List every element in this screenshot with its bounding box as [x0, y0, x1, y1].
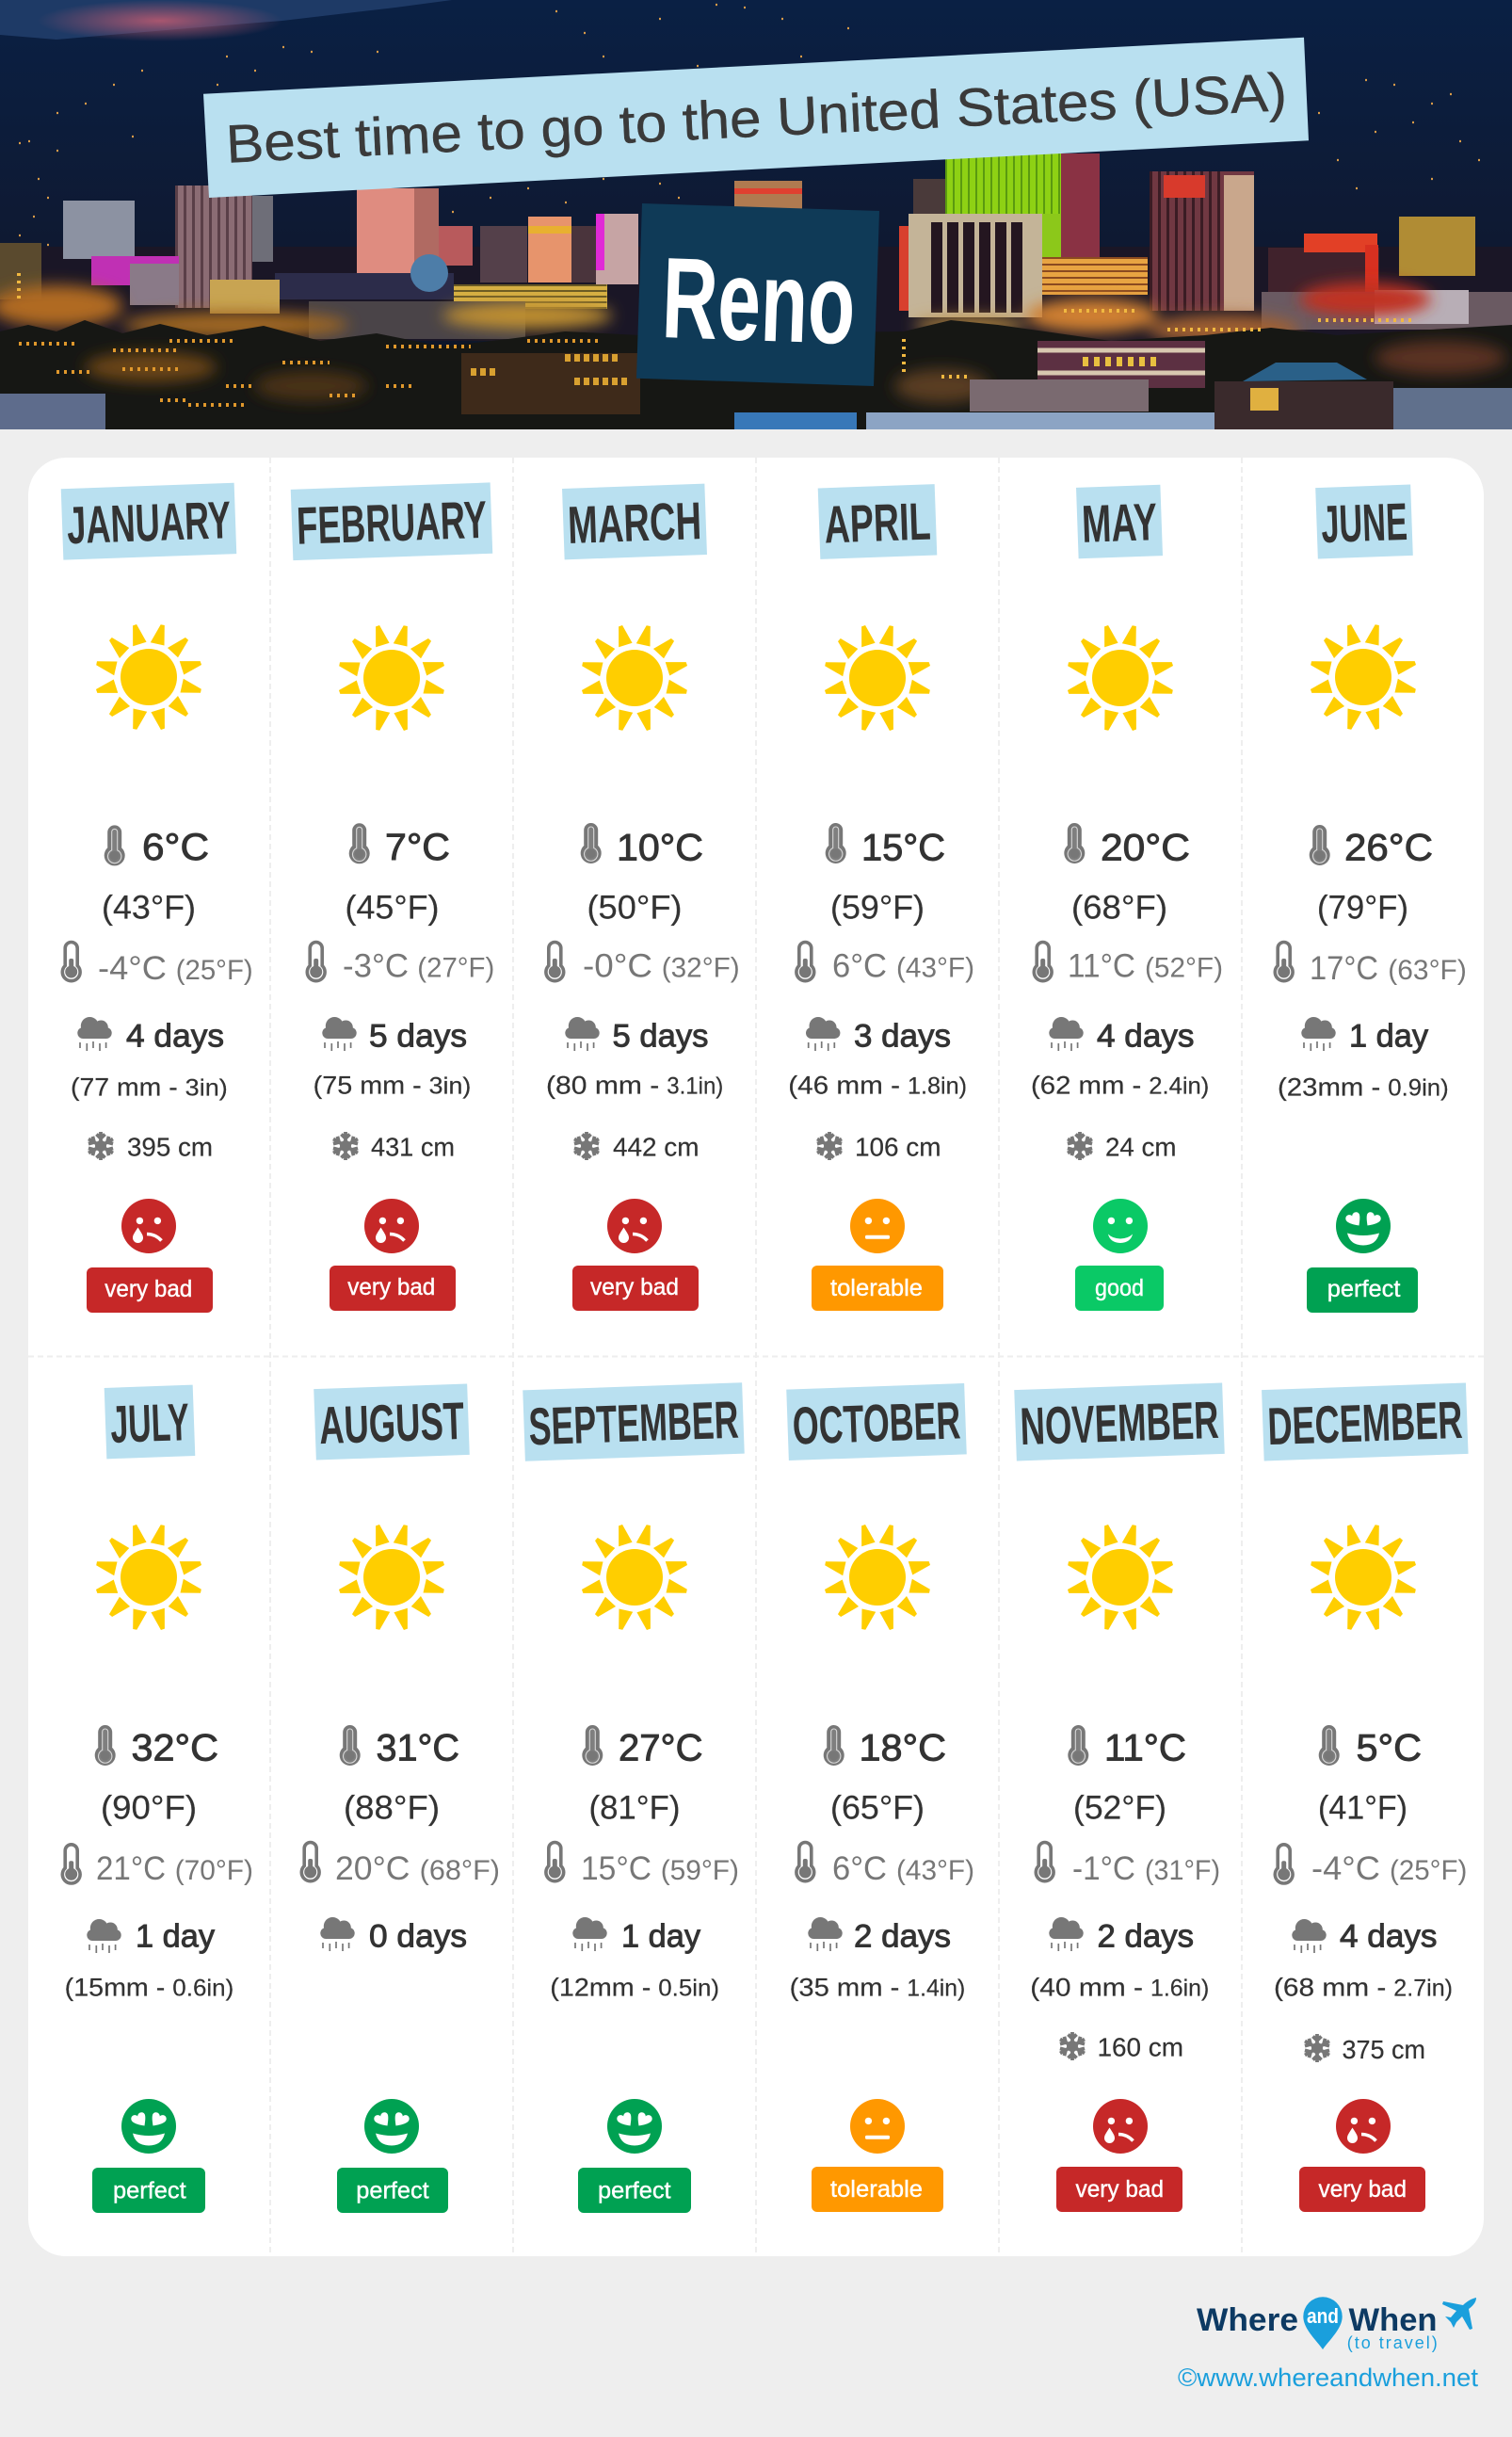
snowfall: [331, 1132, 455, 1162]
icon: good face: [1093, 1199, 1148, 1253]
rainy days: [322, 1017, 467, 1055]
month heading: FEBRUARY: [296, 490, 488, 556]
low temperature: (43°F): [896, 953, 974, 984]
snowfall: 431 cm: [371, 1133, 455, 1162]
low temperature: 17°C: [1310, 950, 1378, 987]
rainy days: 2 days: [854, 1919, 951, 1955]
panel: June: [1275, 485, 1467, 1313]
rainy days: 1 day: [1349, 1019, 1428, 1055]
header photo: Reno skyline at dusk: [0, 0, 1512, 429]
high temperature Fahrenheit: (88°F): [344, 1790, 440, 1827]
rainy days: [808, 1917, 951, 1955]
rainfall: 2.4in): [1149, 1073, 1209, 1100]
rainy days: 1 day: [136, 1919, 215, 1955]
high temperature Fahrenheit: (79°F): [1317, 890, 1408, 927]
high temperature: 18°C: [859, 1727, 946, 1768]
low temperature: (31°F): [1145, 1855, 1220, 1886]
low temperature: [307, 942, 494, 985]
snowfall: [1058, 2032, 1183, 2062]
rating badge: [812, 1266, 943, 1311]
rainy days: [1049, 1917, 1194, 1955]
icon: sun: [824, 1524, 931, 1631]
low temperature: 6°C: [832, 948, 887, 985]
snowfall: [572, 1132, 699, 1162]
high temperature Fahrenheit: (43°F): [102, 890, 196, 927]
rainfall: [71, 1073, 228, 1101]
panel: February: [291, 482, 494, 1311]
high temperature Fahrenheit: (90°F): [101, 1790, 197, 1827]
month heading: SEPTEMBER: [528, 1390, 740, 1456]
rainy days: 5 days: [612, 1019, 708, 1055]
rating badge: [1075, 1266, 1164, 1311]
low temperature: (68°F): [420, 1855, 500, 1886]
high temperature: 31°C: [377, 1727, 459, 1768]
rating badge: [812, 2167, 943, 2212]
low temperature: [796, 1842, 974, 1887]
low temperature: (52°F): [1145, 953, 1223, 984]
rainy days: [77, 1017, 224, 1055]
month heading: OCTOBER: [792, 1390, 961, 1456]
rainfall: 3in): [429, 1073, 471, 1100]
website URL: ©www.whereandwhen.net: [1178, 2364, 1479, 2392]
low temperature: (63°F): [1388, 955, 1467, 986]
icon: sun: [338, 624, 445, 732]
rainy days: [1049, 1017, 1194, 1055]
rainy days: 4 days: [126, 1019, 224, 1055]
high temperature: [340, 1725, 459, 1768]
icon: sun: [1310, 1524, 1417, 1631]
rainfall: [790, 1973, 965, 2001]
high temperature: 6°C: [142, 827, 209, 868]
low temperature: [62, 1845, 253, 1887]
panel: monthly calendar card: [28, 458, 1484, 2256]
high temperature: 15°C: [861, 827, 945, 868]
logo: Where and When: When: [1348, 2302, 1437, 2338]
rainfall: [65, 1973, 233, 2001]
rating badge: [87, 1267, 213, 1313]
icon: sun: [1067, 1524, 1174, 1631]
rating badge: [578, 2168, 691, 2213]
month heading: [291, 482, 492, 560]
rating badge: very bad: [105, 1276, 192, 1302]
city name: Reno: [660, 234, 858, 368]
rating badge: [337, 2168, 448, 2213]
rainfall: 3.1in): [667, 1073, 723, 1100]
rainy days: [87, 1919, 215, 1955]
snowfall: 395 cm: [127, 1133, 213, 1162]
month heading: MARCH: [567, 491, 702, 555]
icon: very bad face: [121, 1199, 176, 1253]
high temperature: [1310, 825, 1433, 868]
low temperature: [546, 942, 740, 985]
panel: July: [62, 1385, 253, 2213]
icon: perfect face: [121, 2099, 176, 2154]
high temperature: [95, 1725, 218, 1768]
rainfall: (23mm -: [1278, 1073, 1380, 1101]
icon: very bad face: [1093, 2099, 1148, 2154]
month heading: AUGUST: [318, 1391, 465, 1455]
rainfall: [1031, 1072, 1209, 1100]
icon: sun: [338, 1524, 445, 1631]
month heading: [105, 1385, 195, 1459]
rainfall: [314, 1072, 471, 1100]
low temperature: [1034, 942, 1223, 985]
rainy days: 1 day: [621, 1919, 700, 1955]
high temperature: 20°C: [1101, 827, 1190, 868]
rating badge: tolerable: [830, 2176, 923, 2203]
logo: Where and When: and: [1307, 2304, 1339, 2328]
icon: tolerable face: [850, 2099, 905, 2154]
rainfall: [788, 1072, 967, 1100]
high temperature: [582, 1725, 702, 1768]
rainfall: (12mm -: [550, 1973, 651, 2001]
rainfall: (80 mm -: [546, 1072, 659, 1100]
logo: Where and When: [1197, 2297, 1476, 2352]
snowfall: 375 cm: [1343, 2035, 1425, 2064]
low temperature: (27°F): [417, 953, 494, 984]
high temperature: [1319, 1725, 1422, 1768]
low temperature: -3°C: [343, 948, 409, 985]
icon: perfect face: [364, 2099, 419, 2154]
panel: March: [546, 484, 740, 1311]
icon: sun: [581, 624, 688, 732]
rainy days: 4 days: [1097, 1019, 1194, 1055]
month heading: JUNE: [1320, 492, 1408, 554]
rainy days: [320, 1917, 467, 1955]
high temperature Fahrenheit: (41°F): [1318, 1790, 1407, 1827]
low temperature: -4°C: [98, 950, 167, 987]
icon: tolerable face: [850, 1199, 905, 1253]
high temperature: [349, 823, 450, 868]
icon: sun: [1067, 624, 1174, 732]
month heading: [314, 1383, 470, 1461]
rating badge: [1307, 1267, 1418, 1313]
rainfall: [546, 1072, 723, 1100]
rainfall: [1278, 1073, 1449, 1101]
low temperature: -4°C: [1311, 1850, 1380, 1887]
rainy days: 3 days: [854, 1019, 951, 1055]
low temperature: [301, 1842, 500, 1887]
rainy days: 2 days: [1098, 1919, 1194, 1955]
rainfall: 3in): [185, 1074, 228, 1101]
rainfall: [1030, 1973, 1209, 2001]
high temperature: [824, 1725, 946, 1768]
rating badge: perfect: [1327, 1276, 1400, 1302]
low temperature: [1275, 1845, 1467, 1887]
high temperature: 7°C: [385, 827, 450, 868]
icon: sun: [581, 1524, 688, 1631]
high temperature: [1068, 1725, 1186, 1768]
high temperature: [581, 823, 703, 868]
icon: map pin: [1303, 2297, 1343, 2349]
rating badge: very bad: [590, 1274, 679, 1300]
rainfall: (15mm -: [65, 1973, 165, 2001]
title text: Best time to go to the United States (USA): [224, 62, 1288, 175]
low temperature: 11°C: [1068, 948, 1135, 985]
high temperature Fahrenheit: (50°F): [587, 890, 682, 927]
month heading: [523, 1382, 745, 1461]
snowfall: [1303, 2034, 1425, 2064]
rating badge: very bad: [347, 1274, 435, 1300]
icon: very bad face: [607, 1199, 662, 1253]
rainfall: (46 mm -: [788, 1072, 900, 1100]
low temperature: (25°F): [176, 955, 253, 986]
high temperature: 26°C: [1344, 827, 1433, 868]
snowfall: 442 cm: [613, 1133, 699, 1162]
panel: April: [788, 484, 974, 1311]
rating badge: tolerable: [830, 1275, 923, 1301]
month heading: MAY: [1081, 492, 1158, 554]
high temperature: [826, 823, 945, 868]
high temperature Fahrenheit: (65°F): [830, 1790, 925, 1827]
low temperature: (59°F): [661, 1855, 739, 1886]
icon: perfect face: [1336, 1199, 1391, 1253]
high temperature: [1064, 823, 1190, 868]
rating badge: [330, 1266, 456, 1311]
high temperature: [105, 825, 209, 868]
low temperature: 15°C: [581, 1850, 651, 1887]
logo: Where and When: Where: [1197, 2302, 1298, 2338]
month heading: [61, 483, 236, 560]
icon: sun: [1310, 623, 1417, 731]
rainy days: 4 days: [1340, 1919, 1437, 1955]
rating badge: very bad: [1318, 2176, 1407, 2203]
rainfall: 1.8in): [908, 1073, 967, 1100]
rainfall: 2.7in): [1393, 1975, 1453, 2001]
month heading: [562, 484, 707, 559]
low temperature: 6°C: [832, 1850, 887, 1887]
logo: Where and When: (to travel): [1347, 2333, 1438, 2352]
high temperature Fahrenheit: (52°F): [1073, 1790, 1166, 1827]
rating badge: perfect: [113, 2177, 186, 2203]
high temperature: 5°C: [1356, 1727, 1422, 1768]
month heading: [1315, 485, 1413, 558]
rainfall: (40 mm -: [1030, 1973, 1143, 2001]
icon: very bad face: [1336, 2099, 1391, 2154]
rating badge: perfect: [356, 2177, 429, 2203]
panel: May: [1031, 485, 1223, 1311]
high temperature: 27°C: [619, 1727, 702, 1768]
rainfall: (62 mm -: [1031, 1072, 1141, 1100]
month heading: [1014, 1382, 1225, 1461]
low temperature: -1°C: [1072, 1850, 1135, 1887]
low temperature: [546, 1842, 739, 1887]
snowfall: 160 cm: [1098, 2033, 1183, 2062]
rainy days: [1301, 1017, 1428, 1055]
month heading: APRIL: [823, 492, 932, 554]
rating badge: [1299, 2167, 1425, 2212]
panel: November: [1014, 1382, 1225, 2212]
warm city glow: [0, 282, 1431, 345]
low temperature: [1275, 942, 1467, 987]
high temperature: 11°C: [1104, 1727, 1186, 1768]
title banner: [203, 38, 1309, 198]
rating badge: [92, 2168, 205, 2213]
snowfall: [815, 1132, 941, 1162]
low temperature: [1036, 1842, 1220, 1887]
rainfall: [550, 1973, 719, 2001]
skyline buildings: [0, 247, 1512, 341]
rating badge: good: [1095, 1275, 1144, 1301]
panel: August: [301, 1383, 500, 2213]
low temperature: (32°F): [662, 953, 740, 984]
rainfall: 1.4in): [907, 1975, 965, 2001]
month heading: [1076, 485, 1163, 558]
rainfall: 0.5in): [658, 1975, 719, 2001]
month heading: JANUARY: [66, 490, 232, 555]
high temperature: 10°C: [617, 827, 703, 868]
rainfall: [1274, 1973, 1453, 2001]
high temperature Fahrenheit: (68°F): [1071, 890, 1167, 927]
rating badge: [1056, 2167, 1182, 2212]
high temperature Fahrenheit: (81°F): [589, 1790, 680, 1827]
rainfall: 0.9in): [1388, 1074, 1449, 1101]
month heading: [818, 484, 937, 559]
snowfall: [1066, 1132, 1177, 1162]
rainfall: (77 mm -: [71, 1073, 178, 1101]
high temperature Fahrenheit: (45°F): [345, 890, 439, 927]
rainfall: (75 mm -: [314, 1072, 422, 1100]
snowfall: [87, 1132, 213, 1162]
rainfall: 1.6in): [1150, 1975, 1209, 2001]
rainy days: 5 days: [369, 1019, 467, 1055]
rainy days: [806, 1017, 951, 1055]
panel: January: [61, 483, 253, 1313]
icon: perfect face: [607, 2099, 662, 2154]
month heading: JULY: [109, 1392, 190, 1454]
low temperature: 20°C: [335, 1850, 410, 1887]
low temperature: (25°F): [1390, 1855, 1467, 1886]
rainfall: (35 mm -: [790, 1973, 899, 2001]
lower town: [0, 320, 1512, 429]
low temperature: -0°C: [583, 948, 652, 985]
snowfall: 106 cm: [855, 1133, 941, 1162]
low temperature: 21°C: [96, 1850, 166, 1887]
low temperature: [796, 942, 974, 985]
icon: sun: [824, 624, 931, 732]
snowfall: 24 cm: [1105, 1133, 1177, 1162]
rainy days: 0 days: [369, 1919, 467, 1955]
panel: October: [786, 1383, 974, 2212]
rating badge: very bad: [1075, 2176, 1164, 2203]
rainy days: [572, 1917, 700, 1955]
high temperature: 32°C: [132, 1727, 218, 1768]
panel: December: [1262, 1383, 1469, 2212]
rainfall: (68 mm -: [1274, 1973, 1386, 2001]
city name box: [636, 203, 879, 386]
month heading: NOVEMBER: [1019, 1390, 1220, 1456]
rainy days: [565, 1017, 708, 1055]
high temperature Fahrenheit: (59°F): [830, 890, 925, 927]
icon: airplane: [1442, 2298, 1476, 2330]
rainy days: [1292, 1919, 1437, 1955]
rating badge: [572, 1266, 699, 1311]
low temperature: [62, 942, 253, 987]
rainfall: 0.6in): [172, 1975, 233, 2001]
icon: sun: [95, 1524, 202, 1631]
rating badge: perfect: [598, 2177, 671, 2203]
icon: sun: [95, 623, 202, 731]
low temperature: (70°F): [175, 1855, 253, 1886]
month heading: [786, 1383, 967, 1461]
icon: very bad face: [364, 1199, 419, 1253]
panel: September: [523, 1382, 745, 2213]
low temperature: (43°F): [896, 1855, 974, 1886]
